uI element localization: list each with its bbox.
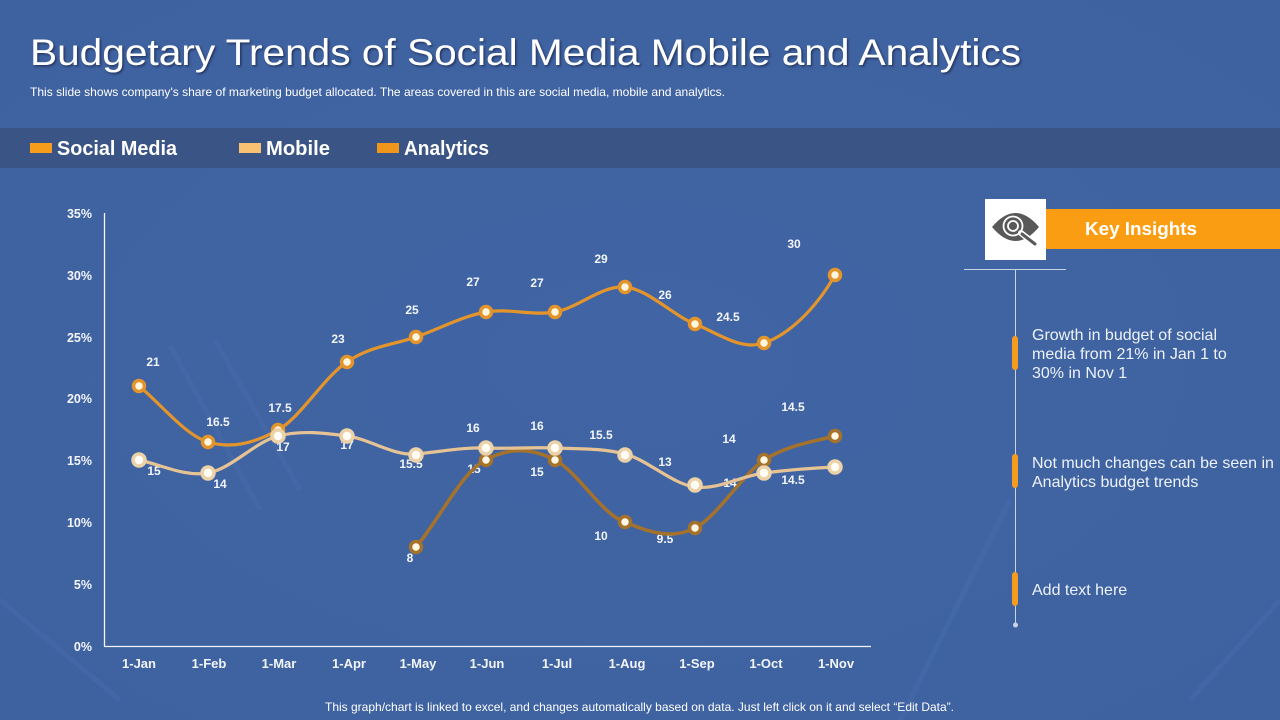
- series: mobile: [133, 430, 841, 491]
- data labels: social media: 29: [594, 252, 608, 266]
- y axis labels: 15%: [67, 454, 92, 468]
- insight 3: Add text here: [1032, 582, 1127, 599]
- data labels: analytics: 15: [530, 465, 544, 479]
- data labels: mobile: 14.5: [781, 473, 805, 487]
- data labels: mobile: 15.5: [589, 428, 613, 442]
- y axis labels: [67, 207, 92, 654]
- x axis labels: 1-Apr: [332, 656, 366, 671]
- data labels: mobile: 14: [213, 477, 227, 491]
- x axis labels: [122, 656, 855, 671]
- data labels: social media: 24.5: [716, 310, 740, 324]
- x axis labels: 1-Mar: [262, 656, 296, 671]
- x axis labels: 1-Oct: [749, 656, 783, 671]
- data labels: social media: 27: [530, 276, 544, 290]
- key insights banner: Key Insights: [1085, 219, 1197, 239]
- data labels: analytics: 14.5: [781, 400, 805, 414]
- data labels: analytics: 9.5: [657, 532, 674, 546]
- data labels: mobile: 13: [658, 455, 672, 469]
- insight 1: media from 21% in Jan 1 to: [1032, 346, 1227, 363]
- insight 2: Not much changes can be seen in: [1032, 455, 1274, 472]
- key insights banner: [1046, 209, 1280, 249]
- y axis labels: 0%: [74, 640, 92, 654]
- data labels: social media: 30: [787, 237, 801, 251]
- data labels: mobile: 14: [723, 476, 737, 490]
- chart axes: [104, 213, 871, 646]
- data labels: social media: 16.5: [206, 415, 230, 429]
- data labels: mobile: 16: [466, 421, 480, 435]
- legend band: [0, 128, 1280, 168]
- x axis labels: 1-May: [400, 656, 437, 671]
- data labels: social media: 27: [466, 275, 480, 289]
- data labels: analytics: 10: [594, 529, 608, 543]
- panel: key insights: [964, 199, 1280, 628]
- data labels: mobile: 17: [340, 438, 354, 452]
- x axis labels: 1-Aug: [609, 656, 645, 671]
- data labels: social media: 17.5: [268, 401, 292, 415]
- insight 1: 30% in Nov 1: [1032, 365, 1127, 382]
- y axis labels: 25%: [67, 331, 92, 345]
- series: analytics: [410, 430, 840, 552]
- x axis labels: 1-Sep: [679, 656, 715, 671]
- legend: social media: Social Media: [57, 138, 178, 160]
- legend: mobile: [239, 138, 330, 160]
- data labels: analytics: 8: [407, 551, 414, 565]
- legend: analytics: Analytics: [404, 138, 489, 160]
- data labels: mobile: 17: [276, 440, 290, 454]
- icon: eye with magnifier: [985, 199, 1046, 260]
- insight 2: Analytics budget trends: [1032, 474, 1198, 491]
- legend: mobile: Mobile: [266, 138, 330, 160]
- subtitle: This slide shows company's share of marketing budget allocated. The areas covered in this are social media, mobile and analytics.: [30, 85, 725, 99]
- title: Budgetary Trends of Social Media Mobile and Analytics: [30, 32, 1021, 73]
- y axis labels: 10%: [67, 516, 92, 530]
- x axis labels: 1-Feb: [192, 656, 226, 671]
- timeline: [964, 270, 1066, 628]
- data labels: social media: 21: [146, 355, 160, 369]
- x axis labels: 1-Jan: [122, 656, 156, 671]
- y axis labels: 20%: [67, 392, 92, 406]
- series: social media: [134, 270, 840, 448]
- data labels: analytics: 14: [722, 432, 736, 446]
- data labels: social media: 23: [331, 332, 345, 346]
- y axis labels: 30%: [67, 269, 92, 283]
- insight 1: Growth in budget of social: [1032, 327, 1217, 344]
- data labels: analytics: [407, 400, 805, 565]
- data labels: social media: [146, 237, 801, 429]
- y axis labels: 35%: [67, 207, 92, 221]
- insight 3: [1012, 572, 1127, 606]
- data labels: mobile: [147, 419, 805, 491]
- x axis labels: 1-Jul: [542, 656, 572, 671]
- line chart: [67, 207, 871, 671]
- insight 1: [1012, 327, 1227, 382]
- y axis labels: 5%: [74, 578, 92, 592]
- data labels: mobile: 16: [530, 419, 544, 433]
- data labels: analytics: 15: [467, 462, 481, 476]
- x axis labels: 1-Nov: [818, 656, 855, 671]
- insight 2: [1012, 454, 1274, 491]
- data labels: mobile: 15.5: [399, 457, 423, 471]
- x axis labels: 1-Jun: [470, 656, 504, 671]
- data labels: social media: 25: [405, 303, 419, 317]
- footer note: This graph/chart is linked to excel, and changes automatically based on data. Just left click on it and select “Edit Data”.: [325, 700, 954, 714]
- data labels: mobile: 15: [147, 464, 161, 478]
- data labels: social media: 26: [658, 288, 672, 302]
